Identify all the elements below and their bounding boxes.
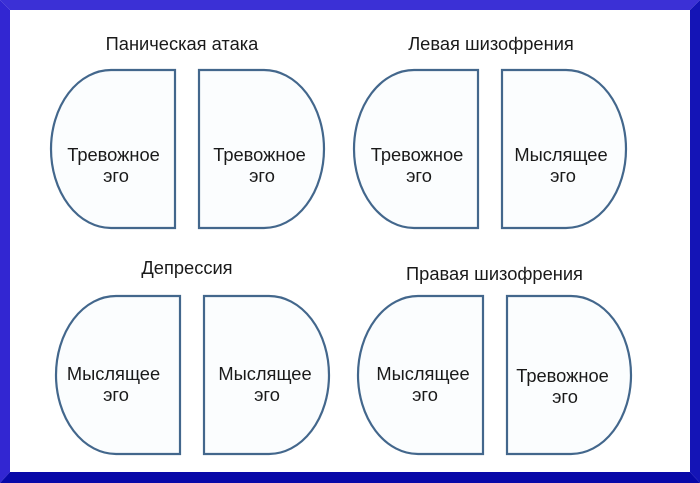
right label: Тревожное [516, 365, 609, 386]
left label: Тревожное [371, 144, 463, 165]
heading: panic attack: Паническая атака [106, 33, 259, 54]
left label: эго [103, 384, 129, 405]
heading: depression: Депрессия [141, 257, 233, 278]
right half shape [199, 70, 324, 228]
right label: Мыслящее [218, 363, 312, 384]
panel: left schizophrenia [354, 33, 626, 228]
left label: Мыслящее [376, 363, 470, 384]
left label: Тревожное [67, 144, 160, 165]
heading: right schizophrenia: Правая шизофрения [406, 263, 583, 284]
right half shape [507, 296, 631, 454]
panel: right schizophrenia [358, 263, 631, 454]
left label: эго [103, 165, 129, 186]
left label: эго [406, 165, 432, 186]
right label: Тревожное [213, 144, 306, 165]
right label: эго [552, 386, 578, 407]
heading: left schizophrenia: Левая шизофрения [408, 33, 574, 54]
right label: Мыслящее [514, 144, 608, 165]
left label: эго [412, 384, 438, 405]
right half shape [204, 296, 329, 454]
left half shape [358, 296, 483, 454]
panel: panic attack [51, 33, 324, 228]
right label: эго [254, 384, 280, 405]
left half shape [354, 70, 478, 228]
panel: depression [56, 257, 329, 454]
right label: эго [249, 165, 275, 186]
left half shape [56, 296, 180, 454]
right label: эго [550, 165, 576, 186]
right half shape [502, 70, 626, 228]
left label: Мыслящее [67, 363, 160, 384]
left half shape [51, 70, 175, 228]
